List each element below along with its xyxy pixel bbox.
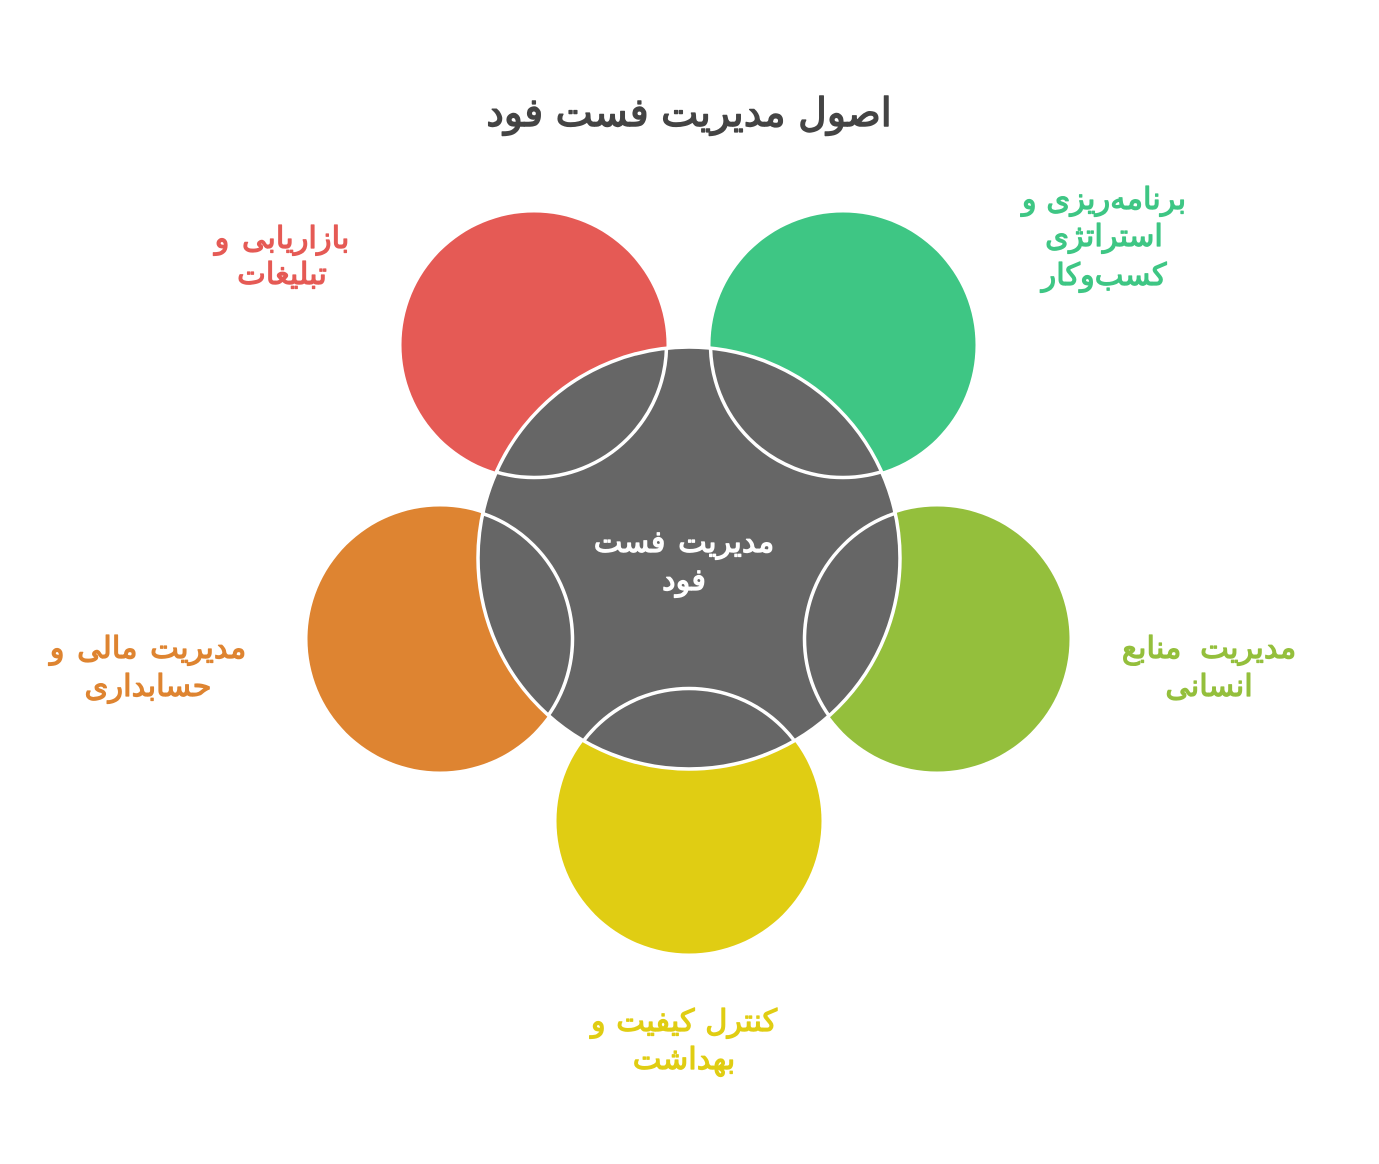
label: planning: برنامه‌ریزی و <box>1020 182 1186 217</box>
title: اصول مدیریت فست فود <box>486 90 892 136</box>
label: quality control <box>589 1004 778 1077</box>
petal: planning (green) <box>710 212 976 478</box>
petal: quality control (yellow) <box>556 688 822 954</box>
label: finance <box>48 631 246 704</box>
petal: marketing (red) <box>402 212 666 478</box>
petal: human resources (olive green) <box>804 506 1070 772</box>
label: human resources <box>1122 631 1296 704</box>
central circle <box>478 347 900 769</box>
label: human resources: انسانی <box>1165 669 1253 704</box>
label: finance: مدیریت مالی و <box>48 631 246 666</box>
label: marketing: تبلیغات <box>237 257 327 292</box>
overlap outlines <box>484 350 894 740</box>
label: marketing: بازاریابی و <box>213 221 349 256</box>
center label: فود <box>662 563 706 598</box>
label: finance: حسابداری <box>85 669 211 704</box>
label: planning <box>1020 182 1186 293</box>
label: quality control: کنترل کیفیت و <box>589 1004 778 1039</box>
center label <box>594 525 774 598</box>
label: human resources: مدیریت منابع <box>1122 631 1296 666</box>
center label: مدیریت فست <box>594 525 774 560</box>
petal: finance (orange) <box>308 506 572 772</box>
label: marketing <box>213 221 349 292</box>
label: quality control: بهداشت <box>633 1042 735 1077</box>
label: planning: کسب‌وکار <box>1040 258 1167 293</box>
label: planning: استراتژی <box>1045 219 1163 254</box>
